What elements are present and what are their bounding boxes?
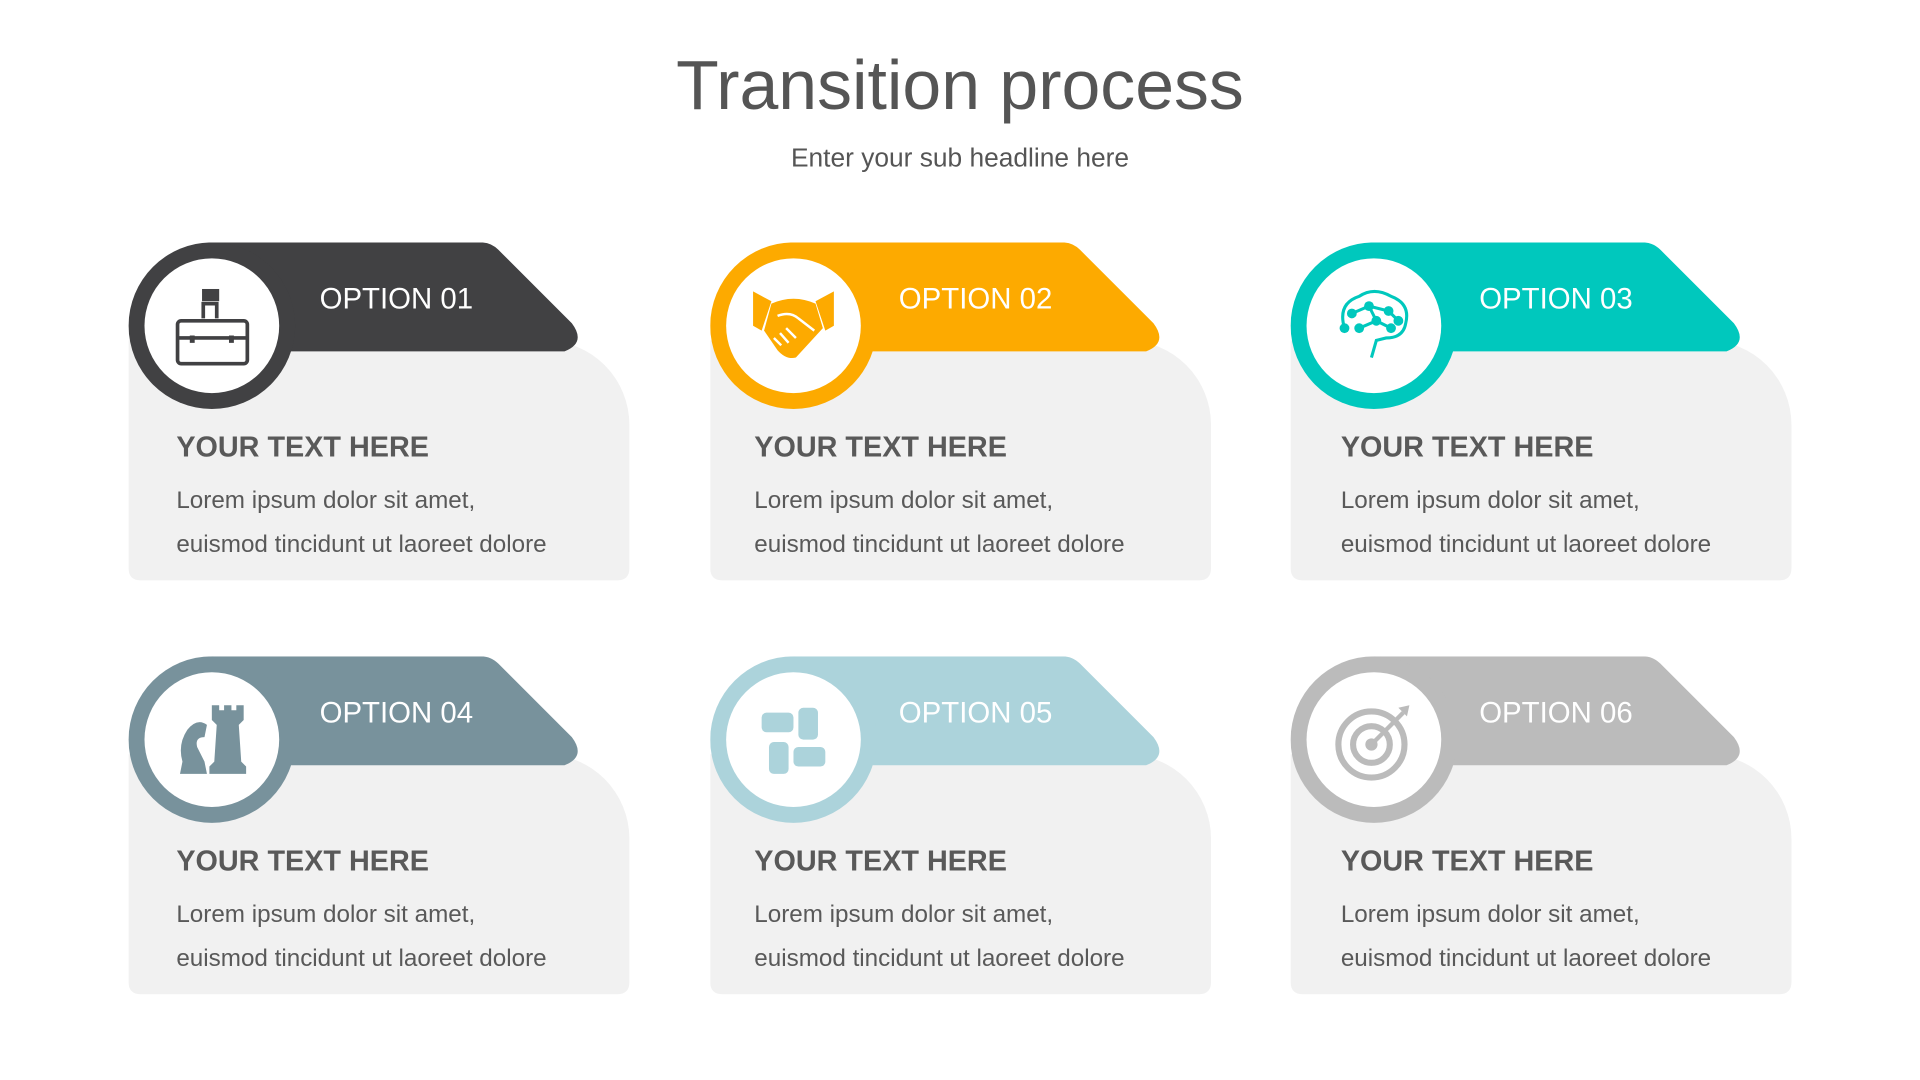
label: OPTION 02 [899,283,1052,316]
label: OPTION 03 [1479,283,1633,316]
body text [1341,901,1711,972]
icon: brain network [1343,291,1407,358]
card: option 03 [1290,242,1792,580]
body text: Lorem ipsum dolor sit amet, [754,487,1053,514]
subtitle: Enter your sub headline here [791,143,1129,173]
heading: YOUR TEXT HERE [176,431,429,463]
card: option 06 [1290,656,1792,994]
title: Transition process [676,47,1244,125]
body text: euismod tincidunt ut laoreet dolore [754,945,1125,972]
body text: Lorem ipsum dolor sit amet, [754,901,1053,928]
body text [176,487,547,558]
heading: YOUR TEXT HERE [1341,845,1593,877]
label: OPTION 05 [899,697,1052,730]
body text [754,901,1125,972]
heading: YOUR TEXT HERE [754,431,1007,463]
body text [754,487,1125,558]
heading: YOUR TEXT HERE [176,845,429,877]
card: option 04 [128,656,630,994]
body text: euismod tincidunt ut laoreet dolore [176,945,547,972]
label: OPTION 04 [320,697,473,730]
icon: target [1338,711,1405,778]
card: option 01 [128,242,630,580]
body text: Lorem ipsum dolor sit amet, [176,901,475,928]
body text: euismod tincidunt ut laoreet dolore [754,531,1125,558]
body text: Lorem ipsum dolor sit amet, [1341,901,1640,928]
heading: YOUR TEXT HERE [1341,431,1593,463]
body text: Lorem ipsum dolor sit amet, [1341,487,1640,514]
body text: euismod tincidunt ut laoreet dolore [1341,531,1711,558]
heading: YOUR TEXT HERE [754,845,1007,877]
body text: euismod tincidunt ut laoreet dolore [1341,945,1711,972]
icon: briefcase [178,304,247,364]
body text: euismod tincidunt ut laoreet dolore [176,531,547,558]
label: OPTION 06 [1479,697,1633,730]
icon: handshake [753,291,834,358]
label: OPTION 01 [320,283,473,316]
body text [1341,487,1711,558]
icon: hands together [762,708,825,774]
body text: Lorem ipsum dolor sit amet, [176,487,475,514]
card: option 05 [710,656,1211,994]
body text [176,901,547,972]
card: option 02 [710,242,1211,580]
icon: chess pieces [180,705,246,774]
